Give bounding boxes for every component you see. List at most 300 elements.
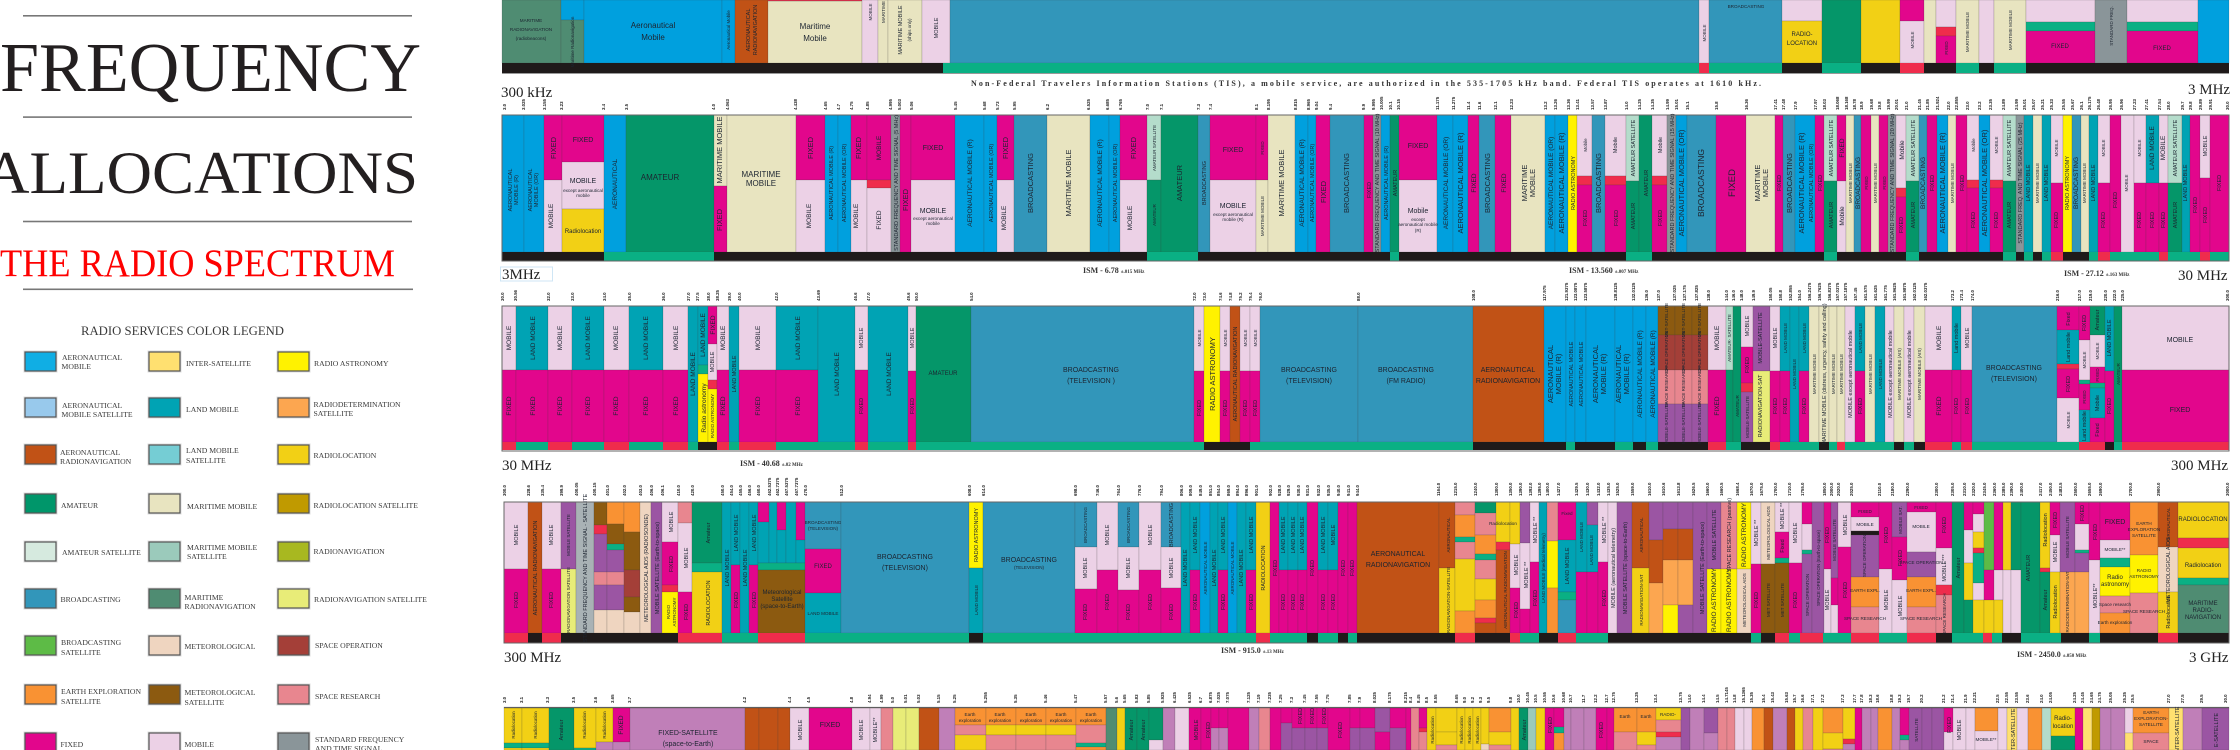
frequency ticks: 21.45 <box>1917 98 1922 110</box>
block labels: RADIO ASTRONOMY <box>974 508 980 562</box>
block labels: AERONAUTICAL <box>1446 517 1451 553</box>
frequency ticks: 1435.0 <box>1606 482 1611 496</box>
block labels: MOBILE SATELLITE (Earth-to-space) <box>1700 522 1706 614</box>
frequency ticks: 608.0 <box>967 484 972 496</box>
block labels: SPACE RESEARCH <box>1664 366 1669 408</box>
frequency ticks: 3.65 <box>610 694 615 703</box>
frequency ticks: 108.0 <box>1471 289 1476 301</box>
legend: aeronautical radionavigation: AERONAUTICAL <box>60 448 121 457</box>
heading: frequency: FREQUENCY <box>0 30 421 107</box>
frequency ticks: 1675.0 <box>1759 482 1764 496</box>
legend: meteorological satellite: METEOROLOGICAL <box>184 688 256 697</box>
frequency ticks: 902.0 <box>1268 484 1273 496</box>
legend: radionavigation <box>277 541 385 562</box>
block labels: FIXED <box>1914 505 1928 510</box>
frequency ticks: 32.0 <box>546 292 551 301</box>
block labels: AERONAUTICAL MOBILE (R) <box>1384 146 1390 220</box>
block labels: MOBILE <box>868 3 873 21</box>
frequency ticks: 20.2 <box>1919 694 1924 703</box>
block labels: MARITIME MOBILE <box>1873 163 1878 203</box>
block labels: Radiolocation <box>1430 716 1435 744</box>
frequency ticks: 9.04 <box>1314 101 1319 110</box>
frequency ticks: 8.215 <box>1403 691 1408 703</box>
frequency ticks: 5.06 <box>909 101 914 110</box>
ISM note 2450: ISM - 2450.0 ±.050 MHz <box>2017 650 2087 659</box>
frequency ticks: 22.855 <box>1954 96 1959 110</box>
block labels: Amateur <box>1956 557 1962 578</box>
block labels: FIXED <box>1994 212 2000 228</box>
frequency ticks: 7.025 <box>1216 691 1221 703</box>
block labels: Earth <box>1026 712 1037 717</box>
frequency ticks: 3.0 <box>502 103 507 110</box>
block labels: MOBILE <box>1884 589 1890 610</box>
frequency ticks: 300.0 <box>502 484 507 496</box>
block labels: AERONAUTICAL <box>1546 345 1555 403</box>
block labels: FIXED <box>715 208 724 231</box>
frequency ticks: 8.195 <box>1266 98 1271 110</box>
block labels: FIXED <box>2080 505 2086 521</box>
frequency ticks: 19.3 <box>1897 694 1902 703</box>
legend: meteorological satellite <box>148 684 256 707</box>
frequency ticks: 23.6 <box>2025 694 2030 703</box>
block labels: FIXED <box>1882 176 1887 190</box>
frequency ticks: 406.1 <box>660 484 665 496</box>
block labels: MOBILE <box>876 135 883 160</box>
block labels: FIXED-SATELLITE <box>658 730 718 737</box>
block labels: FIXED <box>1319 180 1328 203</box>
block labels: Mobile <box>1408 208 1428 215</box>
block labels: MARITIME MOBILE <box>1260 196 1265 236</box>
frequency ticks: 5.03 <box>916 694 921 703</box>
frequency ticks: 24.65 <box>2089 691 2094 703</box>
block labels: BROADCASTING <box>2073 157 2080 209</box>
block labels: LAND MOBILE <box>2026 164 2032 201</box>
frequency ticks: 18.068 <box>1835 96 1840 110</box>
block labels: STANDARD FREQUENCY AND TIME SIGNAL (20 MHz) <box>1890 113 1896 252</box>
legend: radiolocation satellite: RADIOLOCATION SATELLITE <box>314 501 418 510</box>
block labels: FIXED <box>1197 400 1203 416</box>
frequency ticks: 17.9 <box>1793 101 1798 110</box>
block labels: FIXED <box>752 592 758 608</box>
block labels: exploration <box>989 718 1012 723</box>
frequency ticks: 2360.0 <box>1992 482 1997 496</box>
block labels: Mobile <box>803 34 827 43</box>
block labels: MOBILE <box>2082 351 2087 369</box>
block labels: LAND MOBILE <box>725 549 731 586</box>
block labels: MOBILE-SATELLITE <box>1697 402 1702 444</box>
block labels: BROADCASTING <box>1342 153 1351 213</box>
block labels: MOBILE SATELLITE <box>2065 516 2070 558</box>
frequency ticks: 27.54 <box>2157 98 2162 110</box>
frequency ticks: 2300.0 <box>1934 482 1939 496</box>
block labels: METEOROLOGICAL AIDS (RADIOSONDE) <box>644 514 650 622</box>
frequency ticks: 3.155 <box>542 98 547 110</box>
frequency ticks: 5.25 <box>952 694 957 703</box>
block labels: AMATEUR <box>1829 202 1835 228</box>
block labels: LAND MOBILE <box>643 315 650 360</box>
block labels: MOBILE <box>859 719 865 740</box>
block labels: LAND MOBILE <box>795 315 802 360</box>
block labels: (TELEVISION) <box>1286 378 1332 385</box>
frequency ticks: 8.4 <box>1408 696 1413 703</box>
block labels: MARITIME MOBILE <box>1277 149 1286 217</box>
block labels: Earth exploration <box>2098 620 2133 625</box>
block labels: FIXED <box>1858 398 1864 414</box>
frequency ticks: 11.6 <box>1477 101 1482 110</box>
block labels: BROADCASTING <box>1855 157 1862 209</box>
block labels: MET-SATELLITE <box>1697 303 1702 337</box>
block labels: AMATEUR <box>929 371 958 377</box>
frequency ticks: 43.69 <box>816 289 821 301</box>
legend: broadcasting satellite <box>24 635 122 657</box>
frequency ticks: 23.55 <box>2014 691 2019 703</box>
activity bar <box>502 63 2229 74</box>
block labels: FIXED <box>1367 182 1373 198</box>
block labels: Radio astronomy <box>701 383 708 433</box>
block labels: Aeronautical Mobile <box>726 10 731 50</box>
block labels: FIXED <box>1930 175 1936 191</box>
block labels: FIXED <box>1548 717 1554 733</box>
frequency ticks: 2450.0 <box>2048 482 2053 496</box>
frequency ticks: 150.05 <box>1768 287 1773 301</box>
block labels: MOBILE <box>570 178 597 185</box>
frequency ticks: 2690.0 <box>2098 482 2103 496</box>
frequency ticks: 10.5 <box>1533 694 1538 703</box>
allocation blocks <box>502 306 2229 442</box>
block labels: MOBILE except aeronautical mobile <box>1848 330 1854 418</box>
frequency ticks: 2500.0 <box>2073 482 2078 496</box>
block labels: MOBILE <box>1898 595 1904 616</box>
frequency ticks: 20.01 <box>1894 98 1899 110</box>
block labels: MARITIME MOBILE <box>1950 163 1955 203</box>
block labels: RADIO <box>2137 568 2152 573</box>
block labels: MOBILE** <box>2093 583 2099 609</box>
block labels: LAND MOBILE <box>1300 516 1306 553</box>
block labels: MOBILE except aeronautical mobile <box>1907 330 1913 418</box>
block labels: MOBILE SAT. <box>1898 506 1903 534</box>
block labels: LAND MOBILE <box>1183 549 1189 586</box>
block labels: FIXED <box>1773 398 1779 414</box>
frequency ticks: 4.0 <box>711 103 716 110</box>
legend: amateur <box>24 493 99 514</box>
frequency ticks: 30.0 <box>500 292 505 301</box>
frequency ticks: 4.438 <box>793 98 798 110</box>
frequency ticks: 3.3 <box>545 696 550 703</box>
block labels: MOBILE** <box>2105 547 2126 552</box>
block labels: LAND MOBILE <box>1878 359 1883 389</box>
frequency ticks: 161.625 <box>1873 285 1878 301</box>
block labels: FIXED <box>734 592 740 608</box>
block labels: SPACE <box>2143 739 2159 744</box>
frequency ticks: 4.75 <box>849 101 854 110</box>
frequency ticks: 8.65 <box>1454 694 1459 703</box>
block labels: RADIO ASTRONOMY <box>710 394 715 438</box>
frequency ticks: 4.65 <box>823 101 828 110</box>
spectrum row: up to 3 MHz (top strip) <box>502 0 2229 74</box>
frequency ticks: 9.3 <box>1478 696 1483 703</box>
block labels: Radiolocation <box>533 711 538 739</box>
frequency ticks: 1660.5 <box>1719 482 1724 496</box>
legend: radionavigation satellite <box>277 588 427 609</box>
block labels: Land mobile <box>1954 323 1960 353</box>
block labels: Radio- <box>2054 716 2072 722</box>
frequency ticks: 7.1 <box>1159 103 1164 110</box>
block labels: MET SATELLITE <box>1780 583 1785 617</box>
frequency ticks: 1613.8 <box>1676 482 1681 496</box>
block labels: SPACE RESEARCH <box>1681 366 1686 408</box>
frequency ticks: 17.41 <box>1773 98 1778 110</box>
block labels: MOBILE <box>548 203 555 228</box>
legend: maritime mobile satellite: SATELLITE <box>187 552 227 561</box>
block labels: except aeronautical <box>563 188 603 193</box>
frequency ticks: 27.0 <box>2166 694 2171 703</box>
block labels: FIXED <box>901 188 910 211</box>
frequency ticks: 7.4 <box>1208 103 1213 110</box>
block labels: FIXED <box>1899 217 1905 233</box>
frequency ticks: 512.0 <box>839 484 844 496</box>
frequency ticks: 54.0 <box>969 292 974 301</box>
frequency ticks: 4.5 <box>806 696 811 703</box>
block labels: MOBILE <box>710 351 716 372</box>
block labels: FIXED <box>1954 398 1960 414</box>
frequency ticks: 420.0 <box>690 484 695 496</box>
block labels: RADIONAVIGATION-SAT <box>1639 574 1644 626</box>
legend: fixed: FIXED <box>60 740 84 749</box>
block labels: MARITIME <box>881 1 886 23</box>
block labels: FIXED <box>814 564 832 570</box>
block labels: BROADCASTING <box>1378 367 1434 374</box>
frequency ticks: 161.9625 <box>1892 282 1897 301</box>
block labels: AERONAUTICAL <box>612 158 619 209</box>
frequency ticks: 854.0 <box>1216 484 1221 496</box>
block labels: MOBILE <box>720 325 727 350</box>
legend: standard frequency and time signal <box>277 732 405 750</box>
legend: radionavigation satellite: RADIONAVIGATION SATELLITE <box>314 595 427 604</box>
frequency ticks: 46.6 <box>853 292 858 301</box>
block labels: MOBILE <box>2137 139 2142 157</box>
frequency ticks: 88.0 <box>1356 292 1361 301</box>
block labels: AERONAUTICAL MOBILE (R) <box>1637 330 1644 418</box>
block labels: AERONAUTICAL <box>1371 551 1425 558</box>
frequency ticks: 335.4 <box>540 484 545 496</box>
legend: mobile <box>148 732 214 750</box>
block labels: MOBILE SATELLITE <box>1712 509 1718 560</box>
frequency ticks: 7.45 <box>1302 694 1307 703</box>
block labels: FIXED <box>1083 604 1089 620</box>
block labels: exploration <box>1080 718 1103 723</box>
block labels: AERONAUTICAL MOBILE (R) <box>967 139 974 227</box>
block labels: Mobile <box>1971 138 1976 152</box>
block labels: MOBILE <box>514 524 520 545</box>
frequency ticks: 403.0 <box>638 484 643 496</box>
block labels: FIXED <box>1802 398 1808 414</box>
block labels: MOBILE (OR) <box>534 173 540 207</box>
block labels: MOBILE <box>684 547 690 568</box>
block labels <box>508 113 2223 252</box>
frequency ticks: 161.775 <box>1883 285 1888 301</box>
block labels: MOBILE <box>2160 135 2167 160</box>
block labels: Radiolocation <box>582 711 587 739</box>
scale label: 3 MHz with selection box: 3MHz <box>502 267 541 283</box>
block labels: MOBILE <box>746 179 776 188</box>
block labels: SPACE OPERATION (Earth-to-space) <box>1816 529 1821 606</box>
block labels: SPACE RESEARCH <box>1697 366 1702 408</box>
block labels: mobile <box>926 221 940 226</box>
frequency ticks: 1395.0 <box>1537 482 1542 496</box>
block labels: EXPLORATION- <box>2134 716 2168 721</box>
block labels: MOBILE <box>1331 524 1337 545</box>
block labels: AERONAUTICAL MOBILE (R) <box>1299 139 1306 227</box>
block labels: Land mobile <box>2066 332 2072 362</box>
block labels: FIXED <box>1583 210 1589 226</box>
frequency ticks: 12.75 <box>1611 691 1616 703</box>
block labels: MOBILE <box>1169 557 1175 578</box>
frequency ticks: 217.0 <box>2077 289 2082 301</box>
frequency ticks: 5.95 <box>1012 101 1017 110</box>
frequency ticks: 928.0 <box>1277 484 1282 496</box>
scale label: 3 GHz: 3 GHz <box>2189 650 2229 666</box>
block labels: (TELEVISION) <box>1014 565 1045 570</box>
block labels: MOBILE <box>1514 554 1520 575</box>
frequency ticks: 35.0 <box>627 292 632 301</box>
block labels: astronomy <box>2101 582 2129 588</box>
block labels: LAND MOBILE <box>585 315 592 360</box>
block labels: LAND MOBILE (medical telemetry) <box>1541 533 1546 603</box>
block labels: (radiobeacons) <box>516 36 547 41</box>
block labels: FIXED <box>755 396 762 416</box>
legend: maritime mobile: MARITIME MOBILE <box>187 502 258 511</box>
block labels: FIXED <box>1714 396 1721 416</box>
frequency ticks: 764.0 <box>1116 484 1121 496</box>
frequency ticks: 8.025 <box>1372 691 1377 703</box>
block labels: BROADCASTING <box>1001 557 1057 564</box>
block labels: MOBILE <box>613 325 620 350</box>
legend: aeronautical radionavigation: RADIONAVIGATION <box>60 457 132 466</box>
block labels: FIXED <box>2203 207 2209 223</box>
block labels: exploration <box>959 718 982 723</box>
frequency ticks: 18.6 <box>1875 694 1880 703</box>
block labels: Amateur <box>1522 719 1528 740</box>
block labels: FIXED <box>684 604 690 620</box>
frequency ticks: 17.3 <box>1840 694 1845 703</box>
frequency ticks: 18.78 <box>1852 98 1857 110</box>
frequency ticks: 18.03 <box>1822 98 1827 110</box>
block labels: FIXED <box>1281 594 1287 610</box>
frequency ticks: 12.2 <box>1593 694 1598 703</box>
block labels: Earth <box>995 712 1006 717</box>
block labels: MOBILE <box>557 325 564 350</box>
frequency ticks: 24.25 <box>2072 691 2077 703</box>
block labels: FIXED <box>1350 560 1356 576</box>
block labels: MOBILE** <box>1976 737 1997 742</box>
block labels: LAND MOBILE <box>1802 323 1807 353</box>
frequency ticks: 16.6 <box>1800 694 1805 703</box>
block labels: FIXED <box>1602 590 1608 606</box>
block labels: FIXED <box>910 398 916 414</box>
block labels: BROADCASTING <box>1483 153 1492 213</box>
frequency ticks: 27.23 <box>2132 98 2137 110</box>
frequency ticks: 22.5 <box>1995 694 2000 703</box>
block labels: MOBILE** <box>873 717 879 743</box>
frequency ticks: 894.0 <box>1235 484 1240 496</box>
block labels: MOBILE <box>1127 205 1134 230</box>
block labels: LAND MOBILE <box>1579 522 1584 552</box>
block labels: MOBILE <box>1148 524 1154 545</box>
frequency ticks: 30.0 <box>2223 694 2228 703</box>
frequency ticks: 6.7 <box>1198 696 1203 703</box>
frequency ticks: 50.0 <box>914 292 919 301</box>
block labels: FIXED <box>1745 357 1751 373</box>
block labels: MARITIME MOBILE <box>2035 163 2040 203</box>
frequency ticks: 39.0 <box>727 292 732 301</box>
legend: radiolocation: RADIOLOCATION <box>314 451 377 460</box>
block labels: AMATEUR SATELLITE <box>1829 119 1835 176</box>
block labels: except aeronautical <box>1213 212 1253 217</box>
block labels: FIXED <box>1223 400 1229 416</box>
frequency ticks: 157.1875 <box>1843 282 1848 301</box>
block labels: Aeronautical <box>631 21 675 30</box>
block labels: RADIO ASTRONOMY <box>1208 337 1217 411</box>
block labels: LAND MOBILE <box>834 351 841 396</box>
frequency ticks: 173.4 <box>1959 289 1964 301</box>
frequency ticks: 18.9 <box>1859 101 1864 110</box>
block labels: SPACE RESEARCH <box>1900 616 1942 621</box>
title block <box>0 15 421 290</box>
legend: fixed <box>24 732 84 750</box>
block labels: FIXED <box>2105 519 2125 526</box>
block labels: AMATEUR SATELLITE <box>2007 119 2013 176</box>
block labels: MOBILE <box>859 327 865 348</box>
block labels: FIXED <box>2170 407 2190 414</box>
frequency ticks: 467.7375 <box>794 477 799 496</box>
frequency ticks: 24.05 <box>2048 691 2053 703</box>
frequency ticks: 4.995 <box>888 98 893 110</box>
frequency ticks: 38.0 <box>706 292 711 301</box>
block labels: FIXED <box>1291 594 1297 610</box>
frequency ticks: 6.425 <box>1172 691 1177 703</box>
frequency ticks: 13.57 <box>1590 98 1595 110</box>
block labels: AERONAUTICAL MOBILE <box>1203 541 1208 595</box>
frequency ticks: 7.0 <box>1145 103 1150 110</box>
frequency ticks: 15.7 <box>1792 694 1797 703</box>
block labels: MOBILE SATELLITE (Earth-to-space) <box>655 522 661 614</box>
frequency ticks: 3.4 <box>601 103 606 110</box>
frequency ticks: 809.0 <box>1188 484 1193 496</box>
block labels: Mobile <box>1899 140 1906 160</box>
block labels: FIXED <box>585 396 592 416</box>
block labels: Meteorological <box>762 590 802 596</box>
block labels: SPACE OPERATION <box>1664 331 1669 373</box>
block labels: BROADCASTING <box>1594 153 1603 213</box>
frequency ticks: 901.0 <box>1254 484 1259 496</box>
frequency ticks: 75.4 <box>1248 292 1253 301</box>
block labels: FIXED <box>1533 590 1539 606</box>
frequency ticks: 137.025 <box>1672 285 1677 301</box>
frequency ticks: 1430.0 <box>1585 482 1590 496</box>
legend: meteorological <box>148 635 256 656</box>
frequency ticks: 1610.6 <box>1661 482 1666 496</box>
block labels: MOBILE <box>755 325 762 350</box>
block labels: MOBILE <box>1761 169 1770 197</box>
block labels: AMATEUR <box>2026 555 2032 581</box>
frequency ticks: 26.95 <box>2108 98 2113 110</box>
legend: inter-satellite: INTER-SATELLITE <box>186 359 251 368</box>
block labels: MARITIME MOBILE <box>1868 354 1873 394</box>
block labels: Mobile <box>1839 206 1846 226</box>
frequency ticks: 1400.0 <box>1545 482 1550 496</box>
legend: meteorological satellite: SATELLITE <box>184 698 225 707</box>
frequency ticks: 29.8 <box>2188 101 2193 110</box>
